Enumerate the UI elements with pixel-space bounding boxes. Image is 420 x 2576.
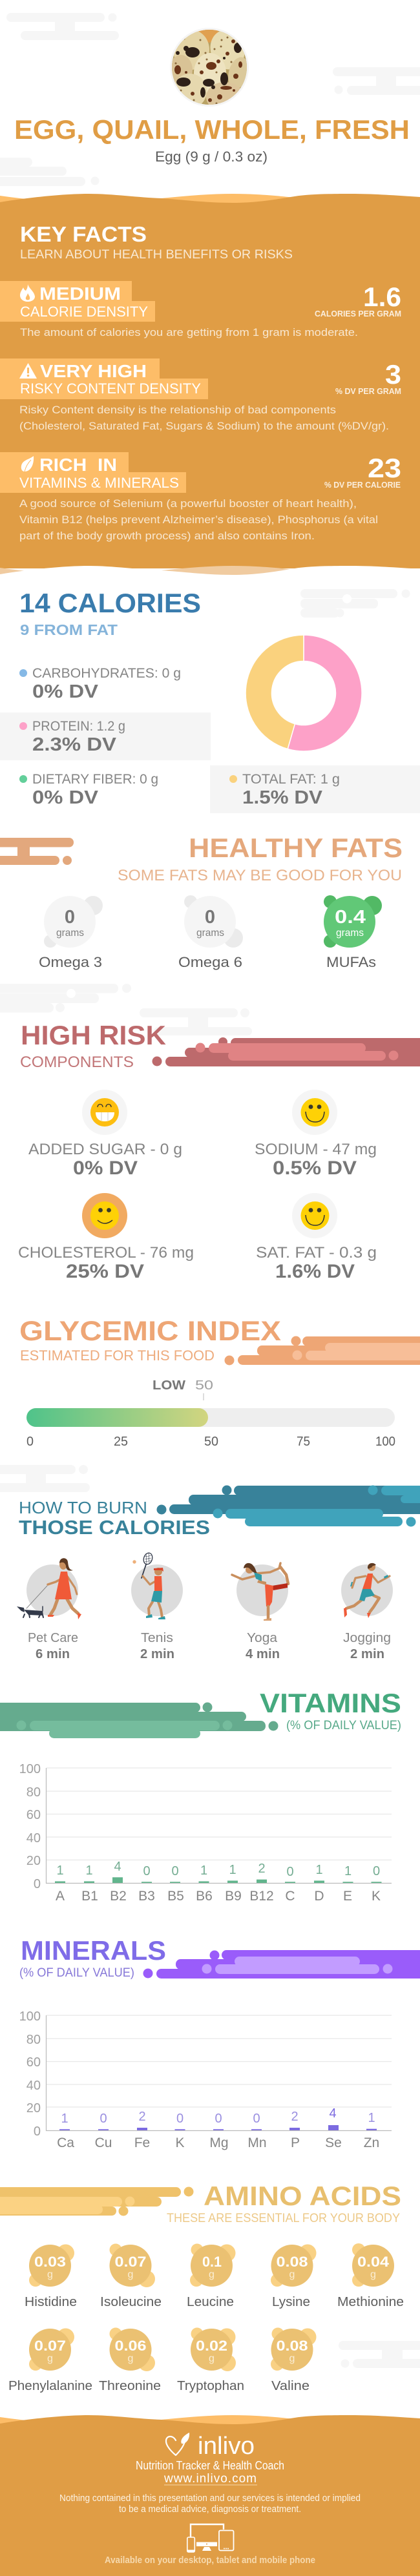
- bar chart: vitamins: 1: [315, 1863, 323, 1877]
- bar chart: vitamins: 100: [19, 1762, 41, 1776]
- bar chart: vitamins: 1: [85, 1864, 93, 1878]
- activity: yoga: Yoga: [247, 1631, 278, 1645]
- bar chart: minerals: Ca: [57, 2135, 74, 2150]
- bar chart: vitamins: 20: [26, 1854, 41, 1868]
- legend: dietary fiber: [19, 772, 158, 808]
- stat: mufas: MUFAs: [326, 954, 376, 970]
- subheading: SOME FATS MAY BE GOOD FOR YOU: [118, 867, 402, 884]
- amino: threonine: 0.06: [115, 2338, 146, 2354]
- amino: methionine: g: [370, 2269, 376, 2280]
- bar chart: minerals: Zn: [364, 2135, 379, 2150]
- gauge scale: 25: [114, 1435, 128, 1449]
- activity: tennis: Tenis: [141, 1631, 173, 1645]
- bar chart: vitamins: 2: [258, 1862, 266, 1876]
- amino: phenylalanine: g: [47, 2353, 53, 2364]
- legend: carbohydrates: [19, 666, 181, 702]
- amino: methionine: 0.04: [357, 2254, 390, 2270]
- heading: how to burn: HOW TO BURN: [19, 1498, 147, 1517]
- heading: vitamins: VITAMINS: [260, 1688, 401, 1718]
- description: [19, 498, 378, 542]
- gi value label: [152, 1378, 213, 1400]
- amino: leucine: [187, 2244, 235, 2309]
- bar chart: vitamins: 0: [143, 1864, 151, 1878]
- icon: smiling face: [301, 1201, 330, 1230]
- legend: carbohydrates: CARBOHYDRATES: 0 g: [32, 666, 181, 681]
- panel: glycemic index: [19, 1316, 420, 1449]
- activity: pet care: 6 min: [36, 1647, 70, 1661]
- bar chart: minerals: P: [291, 2135, 300, 2150]
- gauge scale: 50: [204, 1435, 218, 1449]
- vitamins and minerals block: [0, 452, 401, 542]
- subheading: components: COMPONENTS: [20, 1054, 134, 1071]
- bar chart: vitamins: B5: [167, 1889, 184, 1904]
- panel: minerals: [19, 1935, 420, 2150]
- value: % dv per gram: 3: [385, 359, 401, 390]
- amino: leucine: g: [209, 2269, 215, 2280]
- bar chart: vitamins: A: [56, 1889, 65, 1904]
- icon: grinning face: [90, 1098, 119, 1127]
- amino: histidine: [25, 2244, 77, 2309]
- heading: healthy fats: HEALTHY FATS: [189, 833, 403, 863]
- amino: valine: [271, 2328, 317, 2393]
- heading: high risk: HIGH RISK: [21, 1020, 166, 1050]
- bar chart: minerals: 4: [329, 2106, 337, 2121]
- activity: tennis: [131, 1552, 183, 1661]
- amino: methionine: Methionine: [337, 2295, 404, 2309]
- stat: omega 3: Omega 3: [39, 954, 102, 970]
- heading: calories: 14 CALORIES: [19, 588, 201, 618]
- bar chart: minerals: 0: [34, 2124, 41, 2139]
- subheading: (% OF DAILY VALUE): [286, 1719, 401, 1732]
- legend: dietary fiber: 0% DV: [32, 787, 99, 808]
- stat: mufas: [324, 895, 382, 970]
- value: calories per gram: 1.6: [363, 282, 401, 312]
- logo: inlivo: inlivo: [198, 2433, 255, 2460]
- stat: omega 3: [39, 896, 103, 970]
- risky content density block: [0, 358, 401, 432]
- legend: protein: [0, 712, 211, 760]
- item: sodium: 0.5% DV: [273, 1158, 357, 1179]
- bar chart: vitamins: 1: [200, 1864, 207, 1878]
- heading: glycemic index: GLYCEMIC INDEX: [19, 1316, 281, 1347]
- activity: yoga: [232, 1563, 288, 1661]
- icon: flame: [20, 284, 35, 302]
- bar chart: minerals: Mg: [209, 2135, 229, 2150]
- item: saturated fat: [256, 1193, 377, 1282]
- heading decoration: [0, 2187, 194, 2216]
- bar chart: minerals: [19, 2010, 392, 2150]
- subheading: LEARN ABOUT HEALTH BENEFITS OR RISKS: [20, 247, 293, 262]
- activity: pet care: Pet Care: [28, 1631, 78, 1645]
- panel: healthy fats: [0, 833, 403, 970]
- amino: phenylalanine: 0.07: [34, 2338, 66, 2354]
- bar chart: vitamins: 0: [171, 1864, 179, 1878]
- bar chart: vitamins: B1: [81, 1889, 98, 1904]
- activity: jogging: Jogging: [343, 1631, 391, 1645]
- disclaimer: to be a medical advice, diagnosis or treatment.: [119, 2504, 301, 2515]
- activity: jogging: 2 min: [350, 1647, 384, 1661]
- item: cholesterol: CHOLESTEROL - 76 mg: [18, 1244, 194, 1262]
- availability note: Available on your desktop, tablet and mobile phone: [105, 2555, 315, 2566]
- amino: leucine: 0.1: [202, 2254, 222, 2270]
- bar chart: vitamins: 1: [229, 1863, 236, 1877]
- bar chart: minerals: Se: [325, 2135, 342, 2150]
- bar chart: vitamins: [19, 1762, 392, 1904]
- icon: jogger: [344, 1563, 390, 1618]
- bar chart: minerals: Mn: [247, 2135, 267, 2150]
- gi gauge bar: [26, 1408, 395, 1427]
- donut chart: [246, 635, 362, 751]
- heading: those calories: THOSE CALORIES: [19, 1516, 210, 1539]
- activity: pet care: [17, 1558, 81, 1661]
- bar chart: vitamins: K: [372, 1889, 381, 1904]
- item: sodium: SODIUM - 47 mg: [255, 1141, 377, 1158]
- amino: valine: Valine: [271, 2379, 310, 2393]
- description: The amount of calories you are getting from 1 gram is moderate.: [20, 327, 358, 338]
- bar chart: vitamins: B2: [110, 1889, 127, 1904]
- stat: omega 6: [178, 895, 243, 970]
- stat: omega 3: grams: [56, 928, 84, 939]
- calorie density block: [0, 281, 401, 338]
- icon: warning triangle: [19, 363, 37, 379]
- heading decoration: [152, 1037, 420, 1066]
- amino: leucine: Leucine: [187, 2295, 234, 2309]
- bar chart: vitamins: 1: [56, 1864, 64, 1878]
- item: added sugar: 0% DV: [73, 1158, 138, 1179]
- bar chart: vitamins: 80: [26, 1785, 41, 1800]
- heading decoration: [143, 1950, 420, 1979]
- heading decoration: [225, 1336, 420, 1366]
- label: vitamins and minerals: VITAMINS & MINERALS: [19, 475, 179, 491]
- amino: isoleucine: Isoleucine: [100, 2295, 162, 2309]
- amino: tryptophan: 0.02: [196, 2338, 227, 2354]
- bar chart: vitamins: 60: [26, 1808, 41, 1822]
- amino: threonine: g: [128, 2353, 133, 2364]
- bar chart: vitamins: 1: [344, 1864, 352, 1878]
- icon: devices: [187, 2524, 234, 2552]
- bar chart: minerals: 80: [26, 2033, 41, 2047]
- amino: isoleucine: g: [128, 2269, 133, 2280]
- item: sodium: [255, 1090, 377, 1179]
- amino: histidine: g: [47, 2269, 53, 2280]
- logo: inlivo: [166, 2433, 255, 2460]
- item: added sugar: [28, 1090, 182, 1179]
- bar chart: vitamins: B3: [138, 1889, 155, 1904]
- stat: mufas: 0.4: [335, 907, 366, 928]
- item: added sugar: ADDED SUGAR - 0 g: [28, 1141, 182, 1158]
- value: % dv per calorie: 23: [368, 453, 401, 483]
- gauge scale: 100: [375, 1435, 395, 1449]
- gauge scale: [26, 1435, 395, 1449]
- food photo: quail eggs: [170, 28, 249, 107]
- unit: % DV PER CALORIE: [324, 480, 401, 490]
- amino: phenylalanine: Phenylalanine: [8, 2379, 92, 2393]
- icon: smiling face: [301, 1098, 330, 1127]
- description: Risky Content density is the relationship of bad components: [19, 404, 336, 416]
- item: saturated fat: SAT. FAT - 0.3 g: [256, 1244, 377, 1262]
- stat: omega 6: Omega 6: [178, 954, 242, 970]
- tagline: Nutrition Tracker & Health Coach: [136, 2459, 284, 2472]
- amino: phenylalanine: [8, 2328, 92, 2393]
- rating: medium: MEDIUM: [39, 284, 121, 304]
- bar chart: vitamins: B6: [196, 1889, 213, 1904]
- panel: key facts: [0, 194, 420, 585]
- bar chart: vitamins: B9: [225, 1889, 242, 1904]
- heading decoration: [0, 1703, 278, 1738]
- item: cholesterol: [18, 1193, 194, 1282]
- amino: isoleucine: [100, 2244, 162, 2309]
- icon: yoga pose: [232, 1563, 288, 1621]
- amino: tryptophan: [177, 2328, 244, 2393]
- amino: isoleucine: 0.07: [115, 2254, 146, 2270]
- bar chart: minerals: 1: [368, 2111, 375, 2125]
- gi value label: 50: [195, 1378, 213, 1393]
- bar chart: vitamins: D: [314, 1889, 324, 1904]
- description: A good source of Selenium (a powerful booster of heart health),: [19, 498, 357, 510]
- icon: slight smile face: [90, 1201, 119, 1230]
- subheading: from fat: 9 FROM FAT: [20, 621, 118, 638]
- footer panel: [0, 2415, 420, 2576]
- bar chart: minerals: 20: [26, 2101, 41, 2115]
- description: [19, 404, 389, 432]
- amino: valine: g: [289, 2353, 295, 2364]
- amino: threonine: Threonine: [99, 2379, 161, 2393]
- subheading: THESE ARE ESSENTIAL FOR YOUR BODY: [167, 2212, 400, 2225]
- amino: tryptophan: g: [209, 2353, 215, 2364]
- activity: tennis: 2 min: [140, 1647, 174, 1661]
- bar chart: vitamins: 4: [114, 1860, 121, 1874]
- bar chart: minerals: 60: [26, 2055, 41, 2070]
- gauge scale: 0: [26, 1435, 34, 1449]
- title: EGG, QUAIL, WHOLE, FRESH: [14, 114, 410, 145]
- activity: jogging: [341, 1563, 393, 1661]
- amino: lysine: g: [289, 2269, 295, 2280]
- description: (Cholesterol, Saturated Fat, Sugars & Sodium) to the amount (%DV/gr).: [19, 421, 389, 432]
- legend: total fat: [210, 765, 420, 813]
- panel: vitamins: [0, 1688, 401, 1904]
- subheading: (% OF DAILY VALUE): [19, 1966, 134, 1980]
- unit: % DV PER GRAM: [335, 386, 401, 396]
- legend: protein: 2.3% DV: [32, 734, 117, 755]
- amino: histidine: 0.03: [34, 2254, 66, 2270]
- amino: lysine: [271, 2244, 317, 2309]
- panel: amino acids: [0, 2181, 420, 2393]
- panel: high risk components: [0, 984, 420, 1282]
- heading: amino acids: AMINO ACIDS: [204, 2181, 401, 2211]
- amino: histidine: Histidine: [25, 2295, 77, 2309]
- bar chart: minerals: 0: [215, 2112, 222, 2126]
- amino: threonine: [99, 2328, 161, 2393]
- item: cholesterol: 25% DV: [66, 1261, 144, 1282]
- bar chart: vitamins: B12: [249, 1889, 274, 1904]
- panel: how to burn those calories: [0, 1465, 420, 1661]
- icon: woman walking dog: [17, 1558, 81, 1619]
- website link: www.inlivo.com: [163, 2472, 257, 2486]
- legend: total fat: TOTAL FAT: 1 g: [242, 772, 340, 787]
- bar chart: minerals: 2: [138, 2110, 146, 2124]
- heading: key facts: KEY FACTS: [20, 222, 147, 246]
- label: risky content density: RISKY CONTENT DENSITY: [20, 380, 201, 397]
- bar chart: vitamins: C: [285, 1889, 295, 1904]
- legend: dietary fiber: DIETARY FIBER: 0 g: [32, 772, 158, 787]
- heading: minerals: MINERALS: [21, 1935, 166, 1966]
- stat: omega 6: grams: [196, 928, 224, 939]
- heading decoration: [156, 1486, 420, 1527]
- stat: mufas: grams: [336, 928, 364, 939]
- bar chart: minerals: K: [175, 2135, 185, 2150]
- disclaimer: [59, 2493, 361, 2515]
- bar chart: minerals: Fe: [134, 2135, 150, 2150]
- gi value label: LOW: [152, 1378, 185, 1393]
- bar chart: vitamins: 0: [373, 1864, 380, 1878]
- bar chart: vitamins: 40: [26, 1831, 41, 1845]
- bar chart: vitamins: E: [343, 1889, 352, 1904]
- stat: omega 6: 0: [205, 907, 215, 928]
- serving size: Egg (9 g / 0.3 oz): [155, 149, 268, 165]
- legend: total fat: 1.5% DV: [242, 787, 323, 808]
- legend: carbohydrates: 0% DV: [32, 681, 99, 702]
- legend: protein: PROTEIN: 1.2 g: [32, 719, 125, 734]
- description: Vitamin B12 (helps prevent Alzheimer’s disease), Phosphorus (a vital: [19, 514, 378, 526]
- activity: yoga: 4 min: [246, 1647, 280, 1661]
- icon: leaf: [21, 456, 34, 472]
- description: part of the body growth process) and also contains Iron.: [19, 530, 315, 542]
- icon: tennis player: [132, 1552, 165, 1619]
- bar chart: minerals: Cu: [95, 2135, 112, 2150]
- header panel: [0, 13, 420, 186]
- panel: calories: [0, 588, 420, 813]
- bar chart: minerals: 2: [291, 2110, 299, 2124]
- rating: very high: VERY HIGH: [40, 361, 147, 381]
- bar chart: minerals: 1: [61, 2112, 68, 2126]
- bar chart: minerals: 100: [19, 2010, 41, 2024]
- stat: omega 3: 0: [65, 907, 75, 928]
- item: saturated fat: 1.6% DV: [275, 1261, 355, 1282]
- rating: rich in: RICH IN: [39, 455, 117, 475]
- disclaimer: Nothing contained in this presentation and our services is intended or implied: [59, 2493, 361, 2504]
- amino: valine: 0.08: [277, 2338, 308, 2354]
- gauge scale: 75: [297, 1435, 310, 1449]
- bar chart: vitamins: 0: [286, 1865, 294, 1879]
- amino: methionine: [337, 2243, 404, 2309]
- amino: lysine: Lysine: [272, 2295, 310, 2309]
- amino: tryptophan: Tryptophan: [177, 2379, 244, 2393]
- bar chart: minerals: 0: [253, 2112, 260, 2126]
- bar chart: vitamins: 0: [34, 1877, 41, 1891]
- label: calorie density: CALORIE DENSITY: [20, 304, 148, 320]
- bar chart: minerals: 0: [176, 2112, 184, 2126]
- subheading: ESTIMATED FOR THIS FOOD: [20, 1347, 215, 1364]
- amino: lysine: 0.08: [277, 2254, 308, 2270]
- bar chart: minerals: 0: [100, 2112, 107, 2126]
- bar chart: minerals: 40: [26, 2079, 41, 2093]
- unit: CALORIES PER GRAM: [315, 309, 401, 318]
